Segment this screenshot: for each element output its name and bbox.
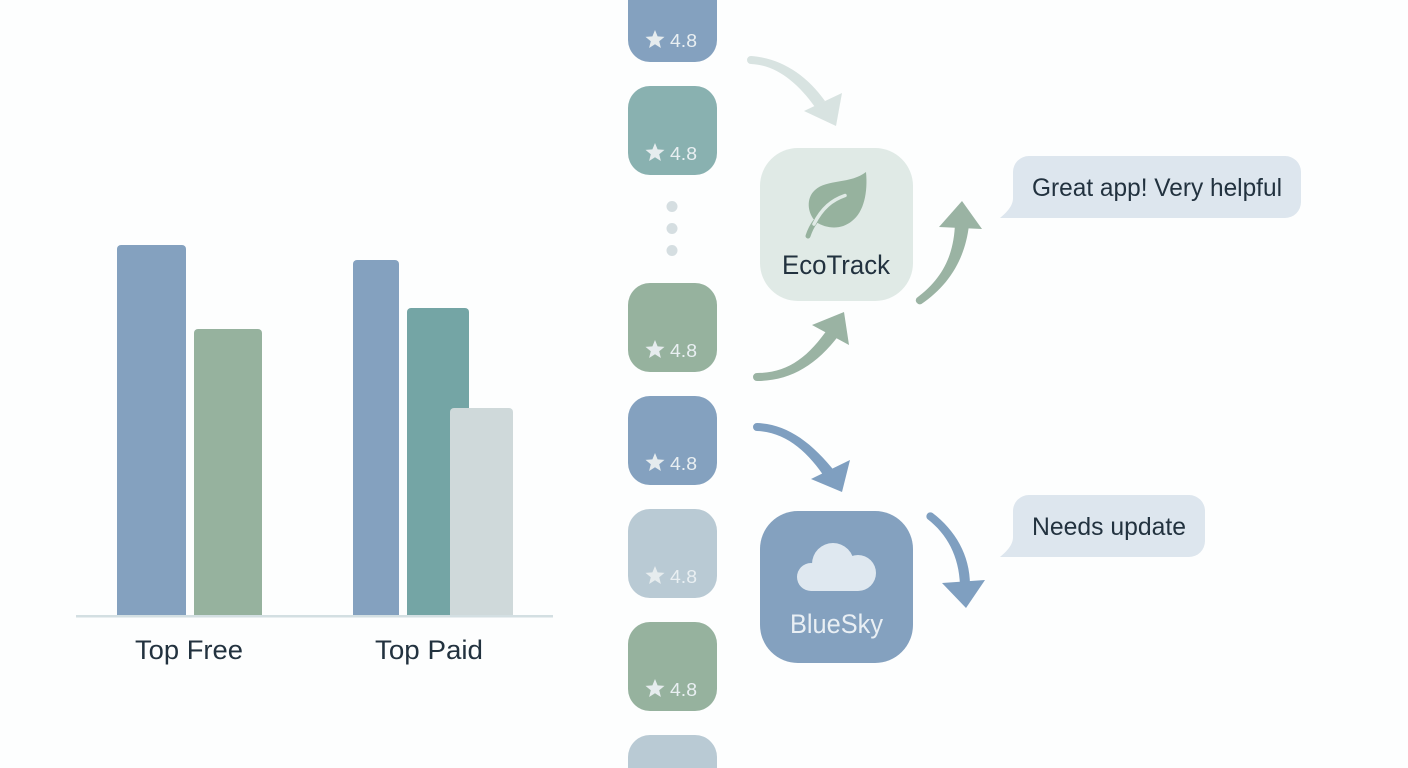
app card: light blue <box>628 509 717 598</box>
label: top free: Top Free <box>135 635 243 665</box>
bar: top paid grey <box>450 408 513 615</box>
app card: green <box>628 283 717 372</box>
app card: teal: 4.8 <box>670 144 697 164</box>
app tile: EcoTrack <box>760 148 913 301</box>
bar: top free blue <box>117 245 186 615</box>
arrow: EcoTrack to review <box>916 201 982 304</box>
label: top paid: Top Paid <box>375 635 483 665</box>
bar: top paid teal <box>407 308 469 615</box>
icon: leaf <box>808 172 866 236</box>
label: EcoTrack: EcoTrack <box>782 250 890 280</box>
app card: blue top <box>628 0 717 62</box>
app card: green lower: 4.8 <box>670 680 697 700</box>
app card: green lower <box>628 622 717 711</box>
ellipsis dots <box>666 201 678 256</box>
arrow: BlueSky to review <box>926 512 985 608</box>
arrow: into EcoTrack from green card <box>753 312 849 381</box>
arrow: into EcoTrack from top <box>747 56 842 126</box>
speech bubble: needs update <box>1000 495 1205 557</box>
app card: light blue: 4.8 <box>670 567 697 587</box>
bar: top free green <box>194 329 262 615</box>
app card: blue: 4.8 <box>670 454 697 474</box>
app card: blue <box>628 396 717 485</box>
speech bubble: positive review: Great app! Very helpful <box>1032 174 1282 202</box>
app card column <box>628 0 717 768</box>
app card: teal <box>628 86 717 175</box>
app card: green: 4.8 <box>670 341 697 361</box>
label: BlueSky: BlueSky <box>790 609 883 639</box>
arrow: into BlueSky <box>753 423 850 492</box>
bar: top paid blue <box>353 260 399 615</box>
icon: cloud <box>797 543 876 591</box>
speech bubble: positive review <box>1000 156 1301 218</box>
app tile: BlueSky <box>760 511 913 663</box>
app card: light blue cut off <box>628 735 717 768</box>
bar chart <box>76 245 553 665</box>
speech bubble: needs update: Needs update <box>1032 513 1186 541</box>
app card: blue top: 4.8 <box>670 31 697 51</box>
